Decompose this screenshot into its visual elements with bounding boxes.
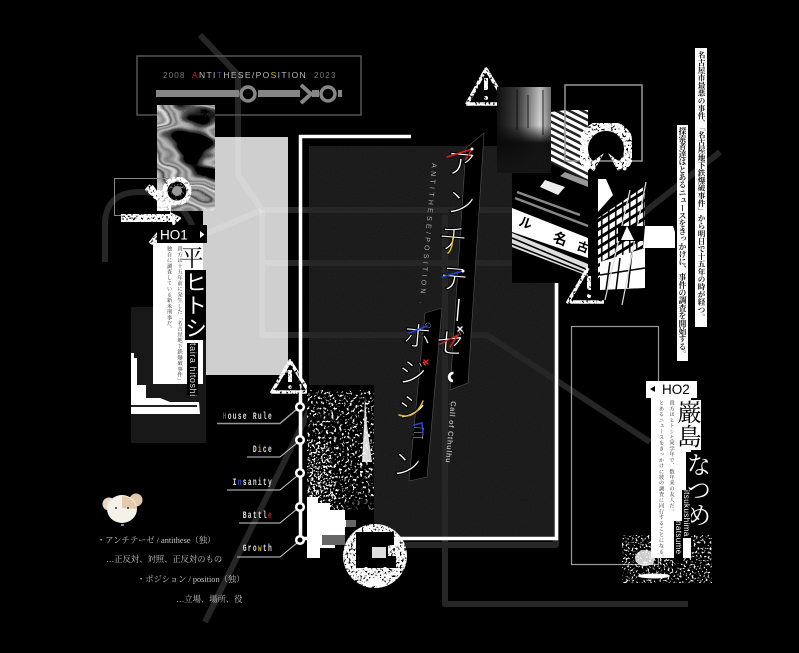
menu: growth: Growth: [243, 543, 273, 555]
glossary line 2: …正反対、対照、正反対のもの: [106, 554, 222, 564]
text block: HO1 description: [166, 246, 183, 389]
outline box HO2: [572, 326, 658, 564]
timeline box: [137, 56, 361, 115]
photo: sign building: 古: [575, 237, 592, 257]
title: antithese: ン: [445, 179, 477, 223]
menu nodes: [217, 403, 304, 557]
name: 平: 平: [180, 246, 204, 271]
label: HO2: HO2: [662, 382, 690, 397]
title: position: ジ: [397, 349, 429, 393]
glossary: [97, 535, 244, 604]
text block: HO2 description: [658, 400, 674, 560]
photo: corridor: [497, 87, 551, 173]
text: natsume: [674, 521, 683, 554]
timeline box: ANTITHESE/POSITION: [192, 70, 307, 80]
title: antithese: テ: [438, 255, 470, 299]
name romaji: itsukushima natsume: [674, 490, 691, 563]
menu: dice: Dice: [253, 444, 273, 456]
text block: HO1 description: 独自に調査している新米刑事だ。: [166, 246, 172, 332]
photo: office tower: [598, 178, 646, 308]
panel: dark textured panel: [309, 146, 556, 538]
arrow: [121, 212, 182, 227]
photo: sign building: [512, 110, 592, 283]
name: なつめ: なつめ: [681, 452, 717, 527]
name romaji: itsukushima natsume: itsukushima: [682, 490, 691, 537]
ring icon: [582, 125, 630, 171]
title: antithese: [435, 140, 481, 363]
photo: sign building: 名: [550, 227, 570, 250]
label: HO2: [646, 381, 697, 398]
title: position: ョ: [408, 414, 430, 445]
subtitle: Call of Cthulhu: Call of Cthulhu: [444, 401, 458, 464]
white tab: [643, 226, 675, 248]
name: 巌島: 巌島: [672, 400, 707, 448]
white card: HO1: [153, 243, 203, 384]
title: position: シ: [396, 384, 428, 428]
text block: HO2 description: とあるニュースをきっかけに彼の調査に同行することになる。: [658, 400, 664, 560]
name: ヒトシ: [185, 270, 206, 340]
photo: sign building: ル: [517, 211, 535, 233]
name: ヒトシ: ヒトシ: [180, 270, 212, 340]
photo: city night view: [307, 385, 374, 558]
subtitle: antithese/position: ANTITHESE/POSITION .: [417, 163, 437, 307]
metro lines over grey block: [258, 208, 265, 214]
text block: HO2 description: 貴方はヒトシと同学年で、数年来の友人だ。: [668, 400, 674, 514]
menu: house rule: House Rule: [223, 411, 273, 423]
metro map lines: [105, 35, 720, 622]
text strip: story 1: 名古屋市最悪の事件、「名古屋地下鉄爆破事件」から明日で十五年の時が経つ。: [697, 51, 706, 321]
white frame: [300, 136, 556, 538]
white card: HO2: [651, 398, 691, 558]
marbled image: [157, 105, 215, 211]
title: antithese: ゼ: [435, 319, 467, 363]
outline square: [565, 85, 642, 161]
title: antithese: ア: [445, 140, 477, 184]
arrow left of card: [148, 232, 166, 246]
text block: HO1 description: 貴方は十五年前に発生した「名古屋地下鉄爆破事件」を: [176, 246, 182, 389]
glossary line 1: ・アンチテーゼ / antithese（独）: [97, 535, 215, 545]
outline box with eye icon: [114, 178, 189, 216]
menu: insanity: Insanity: [233, 477, 273, 489]
dark photo with statue: [131, 307, 206, 443]
title: position: [391, 312, 434, 485]
warning triangle: lower right: [568, 268, 604, 302]
glossary line 4: …立場、場所、役: [176, 594, 243, 604]
text strip: story 2: 探索者達はとあるニュースをきっかけに、事件の調査を開始する。: [678, 127, 687, 358]
label: HO1: [157, 225, 207, 243]
name: 巌島: [677, 400, 701, 450]
panel: light grey block: [203, 137, 288, 375]
HO2 grunge photo: [622, 535, 712, 583]
title: antithese: チ: [437, 215, 469, 259]
icon: train circle: [343, 524, 407, 588]
logo: C: [449, 373, 454, 381]
menu: battle: Battle: [243, 510, 273, 522]
name: なつめ: [686, 452, 711, 528]
title: antithese: ー: [437, 294, 481, 326]
glossary line 3: ・ポジション / position（独）: [137, 574, 244, 584]
warning triangle: middle: [272, 361, 309, 392]
title strip 2: [409, 308, 442, 481]
title colour accents: [399, 148, 474, 433]
label: HO1: HO1: [160, 228, 188, 242]
title: position: ポ: [402, 312, 434, 356]
icon: mouse mascot: [102, 494, 142, 526]
timeline box: 2008: [163, 71, 186, 80]
title strip 1: [450, 133, 484, 390]
title: position: ン: [391, 441, 423, 485]
warning triangle: top: [467, 69, 507, 104]
timeline box: 2023: [314, 71, 337, 80]
name romaji: taira hitoshi: taira hitoshi: [188, 343, 198, 397]
